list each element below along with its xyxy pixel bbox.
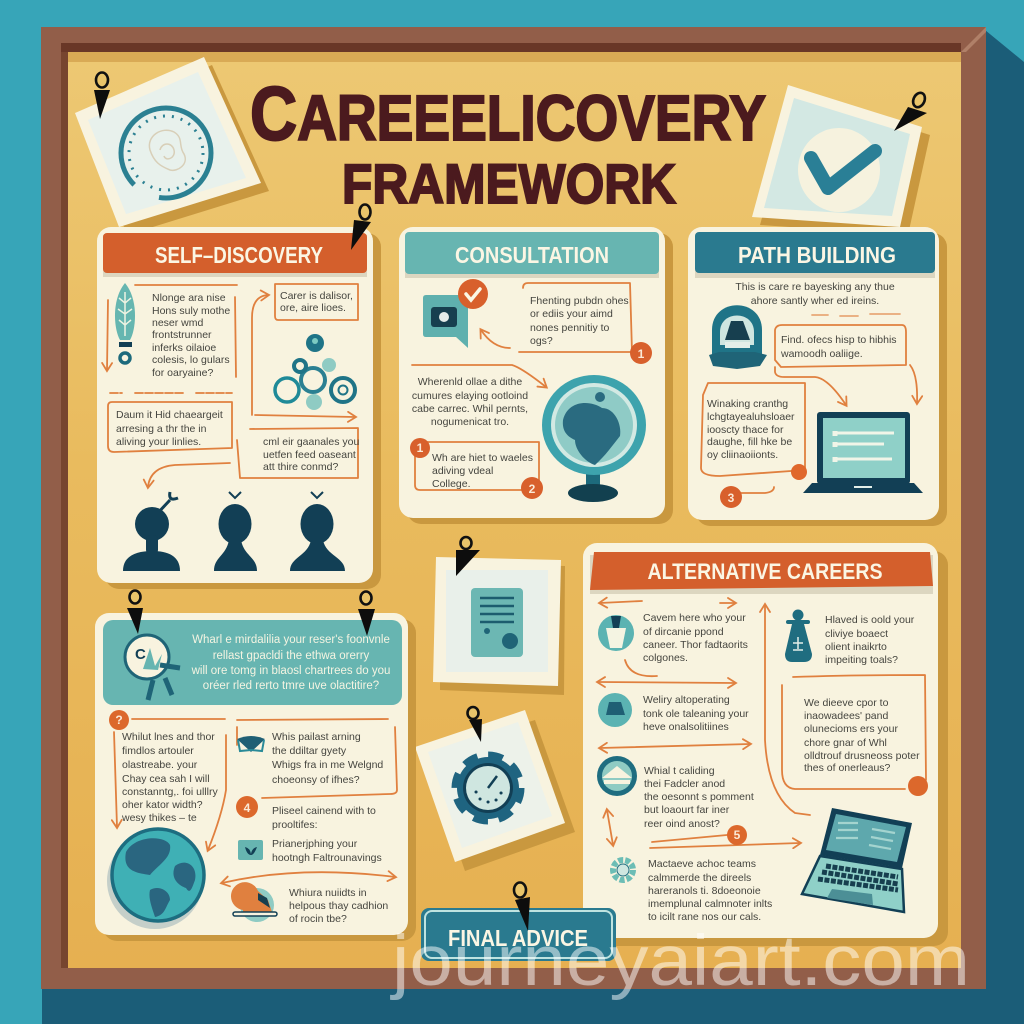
heading: CONSULTATION — [455, 242, 609, 268]
text block: tonk ole taleaning your — [643, 708, 749, 720]
number: 5 — [734, 828, 741, 842]
text box: We dieeve cpor to — [804, 697, 889, 709]
note: document — [433, 557, 565, 695]
text block: for oaryaine? — [152, 367, 213, 379]
text box: arresing a thr the in — [116, 423, 207, 435]
icon: leaf square — [238, 840, 263, 860]
text box — [519, 283, 652, 364]
text box: oy cliinaoiionts. — [707, 449, 778, 461]
arrows — [741, 365, 917, 493]
text box — [782, 675, 928, 796]
text block: Prianerjphing your — [272, 838, 358, 850]
text block: fimdlos artouler — [122, 745, 194, 757]
text block: the oesonnt s pomment — [644, 791, 754, 803]
text block: Pliseel cainend with to — [272, 805, 376, 817]
text box: ore, aire lioes. — [280, 302, 346, 314]
number: 4 — [244, 801, 251, 815]
text block: olastreabe. your — [122, 759, 198, 771]
text block: colesis, lo gulars — [152, 354, 230, 366]
text box — [237, 428, 359, 478]
icon: badge — [709, 305, 767, 369]
note: gear — [415, 710, 575, 871]
icon: laptop — [803, 412, 923, 493]
icon: flask — [785, 610, 812, 662]
text box: Winaking cranthg — [707, 398, 788, 410]
pin — [456, 537, 480, 576]
text box — [701, 383, 807, 508]
icon: document — [471, 588, 523, 657]
text box: 2 — [529, 482, 536, 496]
icon: magnifier: C — [135, 646, 146, 663]
icon: globe — [107, 829, 204, 929]
icon: laptop — [802, 808, 912, 912]
number: ? — [115, 713, 123, 727]
icon: gauge gear — [455, 755, 521, 821]
icon: circular maze — [102, 89, 230, 217]
text box: 1 — [638, 347, 645, 361]
text box: Wh are hiet to waeles — [432, 452, 533, 464]
text block: Wherenld ollae a dithe — [418, 376, 522, 388]
text box: cml eir gaanales you — [263, 436, 359, 448]
text block: wesy thikes – te — [121, 812, 197, 824]
text block: inferks oilaioe — [152, 342, 216, 354]
number — [236, 796, 258, 818]
icon: check — [811, 151, 875, 188]
note: check mark — [752, 85, 930, 235]
text block: olient inaikrto — [825, 641, 887, 653]
text box: daughe, fill hke be — [707, 436, 792, 448]
text block: Whis pailast arning — [272, 731, 361, 743]
icon: magnifier — [125, 635, 180, 700]
text block: choeonsy of ifhes? — [272, 774, 360, 786]
text box: lchgtayealuhsloaer — [707, 411, 795, 423]
text block: neser wmd — [152, 317, 204, 329]
text block: reer oind anost? — [644, 818, 720, 830]
text block: ahore santly wher ed ireins. — [751, 295, 879, 307]
heading block: Wharl e mirdalilia your reser's foonvnle — [192, 634, 390, 646]
text block: imemplunal calmnoter inlts — [648, 898, 772, 910]
text block: thei Fadcler anod — [644, 778, 725, 790]
text box: iooscty thace for — [707, 424, 784, 436]
panel: path building — [688, 227, 947, 526]
text box: 1 — [417, 441, 424, 455]
text block: cumures elaying ootloind — [412, 390, 528, 402]
panel: alternative careers — [583, 543, 948, 946]
text box: inaowadees' pand — [804, 710, 888, 722]
text box: olldtrouf drusneoss poter — [804, 750, 920, 762]
text block: the ddiltar gyety — [272, 745, 347, 757]
text block: to icilt rane nos our cals. — [648, 911, 761, 923]
arrows — [114, 719, 397, 883]
decorative trail — [812, 314, 900, 316]
text block: constanntg,. foi ulllry — [122, 786, 218, 798]
pin — [94, 72, 110, 119]
cork board — [68, 52, 961, 968]
text box: chore gnar of Whl — [804, 737, 887, 749]
text block: hareranols ti. 8doeonoie — [648, 885, 761, 897]
final advice sign: FINAL ADVICE — [448, 925, 588, 951]
text box: ogs? — [530, 335, 553, 347]
number — [727, 825, 747, 845]
text block: helpous thay cadhion — [289, 900, 388, 912]
title: CAREEELICOVERY — [250, 72, 766, 157]
heading — [103, 233, 367, 273]
heading: ALTERNATIVE CAREERS — [648, 559, 882, 584]
text block: Whilut lnes and thor — [122, 731, 215, 743]
icon: career 3 — [597, 756, 637, 796]
text block: Chay cea sah I will — [122, 773, 210, 785]
heading — [405, 232, 659, 274]
text box — [410, 438, 543, 499]
icon: globe on stand — [542, 375, 646, 502]
text box: wamoodh oaliige. — [780, 348, 863, 360]
panel: self-discovery — [97, 227, 381, 589]
text block: cabe carrec. Whil pernts, — [412, 403, 528, 415]
text block: Whiura nuiidts in — [289, 887, 367, 899]
pin — [127, 590, 143, 634]
final advice sign — [421, 908, 616, 961]
panel: questions — [95, 613, 416, 941]
heading: SELF–DISCOVERY — [155, 242, 323, 268]
title: FRAMEWORK — [342, 152, 676, 215]
text box: uetfen feed oaseant — [263, 449, 356, 461]
text box — [275, 284, 358, 320]
text box: College. — [432, 478, 471, 490]
text block: impeiting toals? — [825, 654, 898, 666]
text block: of dircanie ppond — [643, 626, 724, 638]
icon: career 1 — [598, 615, 634, 651]
text block: caneer. Thor fadtaorits — [643, 639, 748, 651]
text block: of rocin tbe? — [289, 913, 347, 925]
icon: career 2 — [598, 693, 632, 727]
text block: colgones. — [643, 652, 688, 664]
icon: leaf — [115, 283, 135, 363]
text box: adiving vdeal — [432, 465, 493, 477]
text block: Nlonge ara nise — [152, 292, 226, 304]
text box: Fhenting pubdn ohes — [530, 295, 629, 307]
text box: Daum it Hid chaeargeit — [116, 409, 223, 421]
pin — [351, 204, 371, 250]
icon: camera bubble — [423, 279, 488, 348]
text box — [108, 402, 232, 452]
text box: thes of onerleaus? — [804, 762, 891, 774]
text block: Mactaeve achoc teams — [648, 858, 756, 870]
pin — [514, 882, 530, 931]
text block: oher kator width? — [122, 799, 203, 811]
watermark: journeyaiart.com — [390, 922, 970, 1001]
text block: nogumenicat tro. — [431, 416, 509, 428]
title — [250, 72, 766, 215]
text block: prooltifes: — [272, 819, 318, 831]
icon: pie on bar — [231, 882, 277, 922]
text box: olunecioms ers your — [804, 723, 898, 735]
text block: Whigs fra in me Welgnd — [272, 759, 383, 771]
heading block: oréer rled rerto tmre uve olactitire? — [203, 680, 379, 692]
text box: Carer is dalisor, — [280, 290, 353, 302]
heading block: will ore tomg in blaosl chartrees do you — [191, 665, 390, 677]
note: maze icon — [75, 57, 269, 235]
text box: aliving your linlies. — [116, 436, 201, 448]
text block: frontstrunner — [152, 329, 212, 341]
arrow — [412, 365, 546, 387]
heading block: rellast gpacldi the ethwa orerry — [213, 650, 370, 662]
arrows — [107, 285, 355, 487]
pin — [468, 707, 482, 742]
text box: 3 — [728, 491, 735, 505]
icon: gears network — [275, 334, 355, 410]
text block: but loaourt far iner — [644, 804, 730, 816]
number — [109, 710, 129, 730]
text block: hootngh Faltrounavings — [272, 852, 382, 864]
arrow — [481, 330, 510, 348]
text block: Hons suly mothe — [152, 305, 230, 317]
text block: cliviye boaect — [825, 628, 888, 640]
panel: consultation — [399, 227, 673, 524]
text block: This is care re bayesking any thue — [735, 281, 895, 293]
heading — [695, 232, 935, 273]
text block: Cavem here who your — [643, 612, 746, 624]
text box: or ediis your aimd — [530, 308, 613, 320]
icon: graduation cap — [237, 736, 265, 752]
arrows — [598, 601, 810, 848]
icon: people — [123, 492, 345, 571]
text box: nones pennitiy to — [530, 322, 610, 334]
text block: calmmerde the direels — [648, 872, 751, 884]
heading: PATH BUILDING — [738, 242, 896, 268]
text block: Hlaved is oold your — [825, 614, 915, 626]
icon: small gear — [613, 860, 633, 880]
text box: Find. ofecs hisp to hibhis — [781, 334, 897, 346]
text block: Whial t caliding — [644, 765, 715, 777]
heading block — [103, 620, 402, 705]
text block: heve onalsolitiines — [643, 721, 729, 733]
text box: att thire conmd? — [263, 461, 338, 473]
text block: Weliry altoperating — [643, 694, 730, 706]
text box — [775, 325, 906, 367]
pin — [894, 91, 927, 131]
pin — [358, 592, 375, 636]
heading — [590, 552, 933, 590]
